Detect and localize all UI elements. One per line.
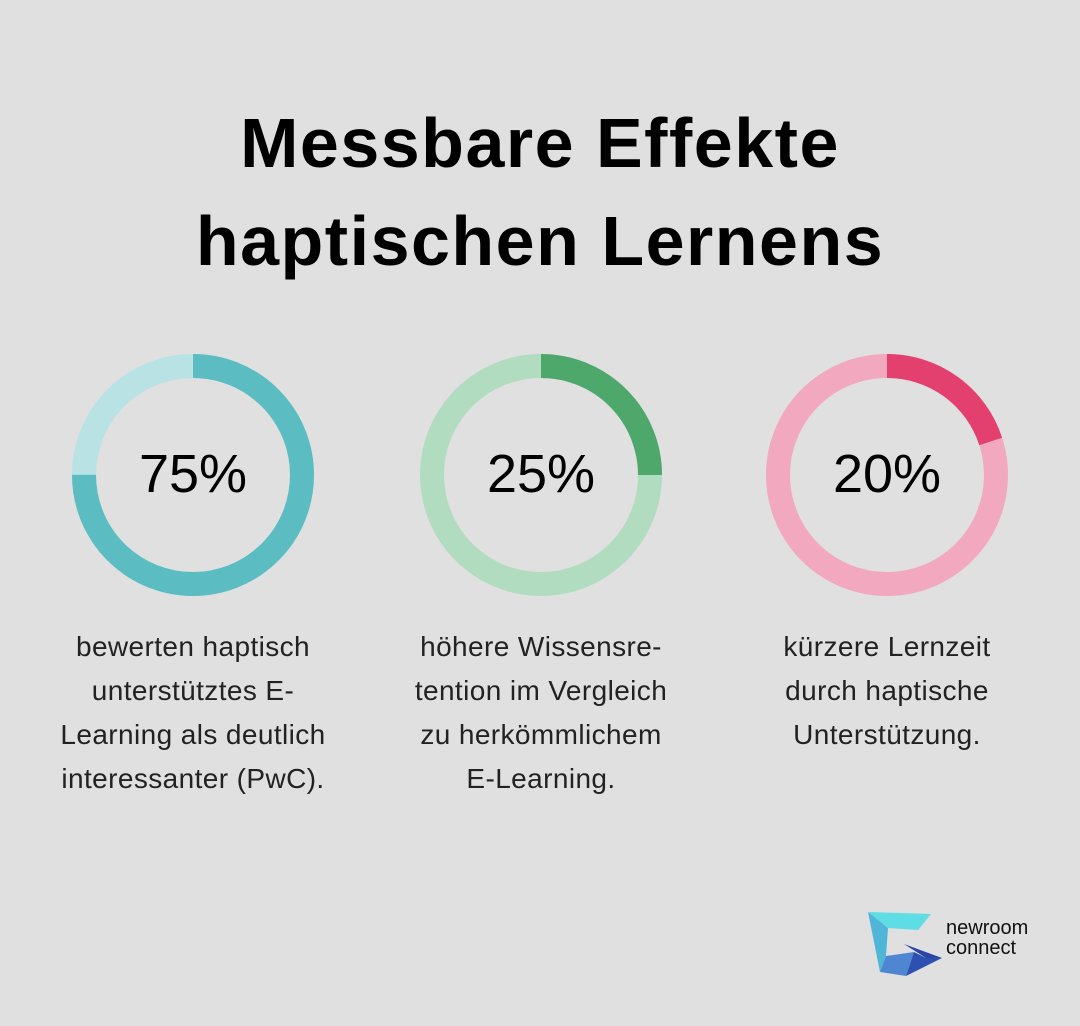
description 1 bbox=[60, 631, 326, 794]
description 2: E-Learning. bbox=[466, 763, 616, 794]
description 3 bbox=[783, 631, 991, 750]
description 3: Unterstützung. bbox=[793, 719, 981, 750]
description 2 bbox=[415, 631, 667, 794]
value: 75%: 75% bbox=[139, 444, 247, 504]
description 1: unterstütztes E- bbox=[92, 675, 294, 706]
description 1: bewerten haptisch bbox=[76, 631, 310, 662]
title: Messbare Effekte bbox=[240, 104, 840, 182]
description 2: zu herkömmlichem bbox=[420, 719, 662, 750]
description 1: interessanter (PwC). bbox=[61, 763, 325, 794]
title bbox=[196, 104, 884, 280]
description 3: kürzere Lernzeit bbox=[783, 631, 991, 662]
value: 20%: 20% bbox=[833, 444, 941, 504]
logo: connect bbox=[946, 937, 1016, 959]
description 1: Learning als deutlich bbox=[60, 719, 326, 750]
description 2: höhere Wissensre- bbox=[420, 631, 662, 662]
donut: 20% bbox=[766, 354, 1008, 596]
title: haptischen Lernens bbox=[196, 202, 884, 280]
logo: newroom bbox=[946, 917, 1028, 939]
description 3: durch haptische bbox=[785, 675, 989, 706]
value: 25%: 25% bbox=[487, 444, 595, 504]
logo bbox=[868, 912, 1028, 976]
description 2: tention im Vergleich bbox=[415, 675, 667, 706]
donut: 25% bbox=[420, 354, 662, 596]
donut: 75% bbox=[72, 354, 314, 596]
